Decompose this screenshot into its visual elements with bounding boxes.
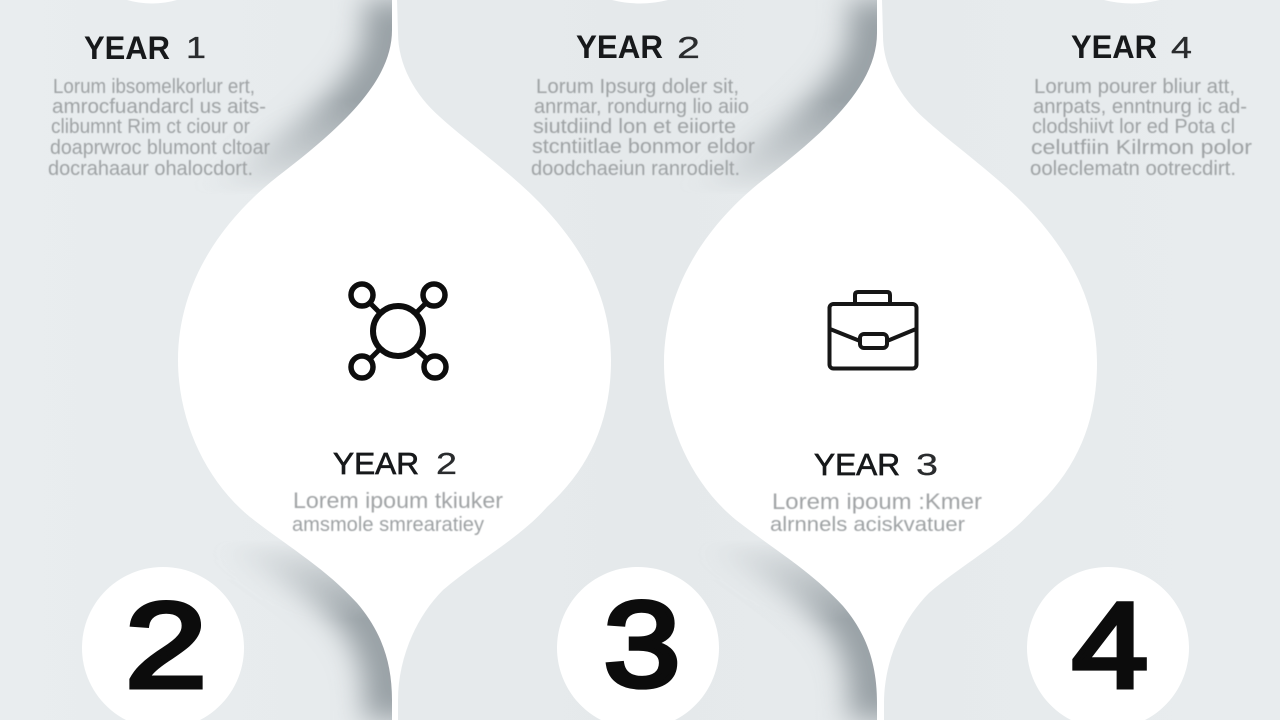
text block: year 2 top: siutdiind lon et eiiorte <box>533 116 736 138</box>
text block: year 4: ooleclematn ootrecdirt. <box>1030 158 1236 180</box>
text block: year 1: Lorum ibsomelkorlur ert, <box>53 76 255 98</box>
text block: year 3 in drop <box>770 447 982 536</box>
text block: year 4: 4 <box>1171 30 1192 65</box>
text block: year 2 top <box>531 29 755 180</box>
text block: year 2 in drop: YEAR <box>333 446 419 481</box>
panel: white drop 2 <box>664 0 1097 720</box>
text block: year 1: amrocfuandarcl us aits- <box>52 96 266 118</box>
number badge 4 <box>1027 567 1189 720</box>
text block: year 2 top: YEAR <box>576 29 663 65</box>
shadows beside drop 2 <box>723 0 877 720</box>
text block: year 1: doaprwroc blumont cltoar <box>50 137 270 159</box>
number badge 2 <box>82 567 244 720</box>
text block: year 4 <box>1030 29 1252 180</box>
text block: year 3 in drop: YEAR <box>814 447 900 482</box>
number badge 3: 3 <box>604 576 680 712</box>
text block: year 2 top: 2 <box>677 30 700 65</box>
text block: year 4: celutfiin Kilrmon polor <box>1031 137 1252 159</box>
panel: white drop 1 <box>178 0 611 720</box>
text block: year 2 top: doodchaeiun ranrodielt. <box>531 158 740 180</box>
text block: year 3 in drop: alrnnels aciskvatuer <box>770 514 965 536</box>
text block: year 2 in drop: 2 <box>436 446 457 481</box>
number badge 4: 4 <box>1072 577 1148 713</box>
text block: year 3 in drop: Lorem ipoum :Kmer <box>772 489 982 514</box>
number badge 2: 2 <box>125 577 207 713</box>
shadows beside drop 1 <box>238 0 392 720</box>
text block: year 2 top: anrmar, rondurng lio aiio <box>534 96 749 118</box>
top circle fragments <box>127 0 1160 4</box>
text block: year 2 in drop: amsmole smrearatiey <box>292 514 484 536</box>
text block: year 1: docrahaaur ohalocdort. <box>48 158 253 180</box>
text block: year 4: YEAR <box>1071 29 1157 65</box>
text block: year 4: anrpats, enntnurg ic ad- <box>1033 96 1247 118</box>
text block: year 4: clodshiivt lor ed Pota cl <box>1032 116 1235 138</box>
text block: year 1: 1 <box>186 30 206 65</box>
icon: briefcase <box>830 292 916 368</box>
text block: year 4: Lorum pourer bliur att, <box>1034 76 1235 98</box>
text block: year 2 in drop: Lorem ipoum tkiuker <box>293 488 503 513</box>
icon: network nodes <box>351 284 446 378</box>
text block: year 2 in drop <box>292 446 503 536</box>
text block: year 1 <box>48 30 270 180</box>
text block: year 1: clibumnt Rim ct ciour or <box>51 116 250 138</box>
number badge 3 <box>557 567 719 720</box>
text block: year 2 top: Lorum Ipsurg doler sit, <box>536 76 739 98</box>
text block: year 2 top: stcntiitlae bonmor eldor <box>532 136 755 158</box>
text block: year 1: YEAR <box>84 30 170 66</box>
text block: year 3 in drop: 3 <box>916 447 938 482</box>
